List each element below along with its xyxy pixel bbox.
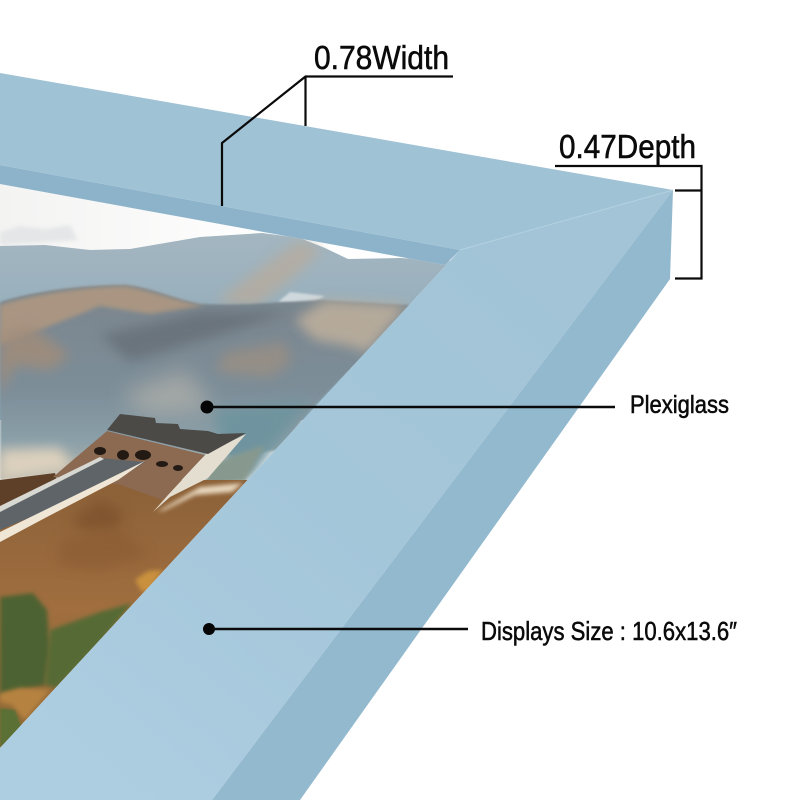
callout: display size bbox=[203, 616, 737, 646]
green forest right bbox=[45, 603, 132, 688]
distant hazy hills bbox=[0, 225, 78, 245]
frame: side rail face bbox=[0, 190, 673, 800]
tower white side bbox=[153, 434, 246, 512]
blue-grey mountain bbox=[0, 233, 470, 420]
stone walkway bbox=[0, 458, 145, 530]
display size line bbox=[212, 628, 468, 630]
sandy fringe under tower bbox=[157, 483, 243, 512]
display size dot bbox=[203, 623, 215, 635]
autumn hillside bbox=[0, 470, 250, 748]
sunlit mist right bbox=[295, 300, 408, 352]
snowy patch bbox=[278, 291, 324, 302]
display size label: Displays Size : 10.6x13.6″ bbox=[481, 616, 737, 646]
depth leader lines bbox=[555, 166, 702, 278]
plexiglass line bbox=[210, 406, 615, 408]
orange trees below forest bbox=[0, 688, 50, 720]
dimension: 0.78 width bbox=[222, 39, 453, 206]
callout: plexiglass bbox=[200, 391, 729, 419]
frame: top rail face bbox=[0, 73, 673, 250]
frame: rabbet inner lip bbox=[0, 165, 460, 265]
dark shadow band bbox=[100, 312, 290, 362]
white wall parapet bbox=[0, 461, 145, 542]
sky bbox=[0, 184, 106, 250]
tower windows bbox=[94, 447, 183, 471]
sunlit rocks bbox=[215, 342, 292, 378]
tan mountain flank bbox=[0, 331, 68, 387]
brown hillside behind wall bbox=[0, 473, 57, 506]
walkway highlight bbox=[0, 457, 104, 512]
picture: Great Wall landscape bbox=[0, 170, 470, 748]
plexiglass label: Plexiglass bbox=[630, 391, 729, 419]
tan ridge crest bbox=[0, 286, 205, 345]
tower battlements bbox=[107, 414, 246, 454]
tower brown wall bbox=[53, 431, 205, 500]
green bottom corner bbox=[0, 708, 22, 748]
depth label: 0.47Depth bbox=[559, 128, 696, 165]
green forest left bbox=[0, 593, 50, 695]
green-grey slope by tower bbox=[204, 446, 263, 480]
pale fog above tower bbox=[120, 370, 215, 415]
plexiglass dot bbox=[200, 400, 214, 414]
far slope with fog bbox=[0, 285, 410, 480]
teal valley bbox=[215, 400, 310, 480]
light beam on mountain bbox=[215, 240, 322, 308]
beige cloud left bbox=[0, 448, 75, 480]
orange tree bbox=[135, 570, 163, 592]
width leader lines bbox=[222, 76, 453, 206]
width label: 0.78Width bbox=[314, 39, 449, 76]
frame: miter joint bbox=[460, 190, 673, 250]
frame: outer side edge bbox=[212, 190, 673, 800]
dark bush patches bbox=[76, 503, 121, 530]
dimension: 0.47 depth bbox=[555, 128, 702, 278]
